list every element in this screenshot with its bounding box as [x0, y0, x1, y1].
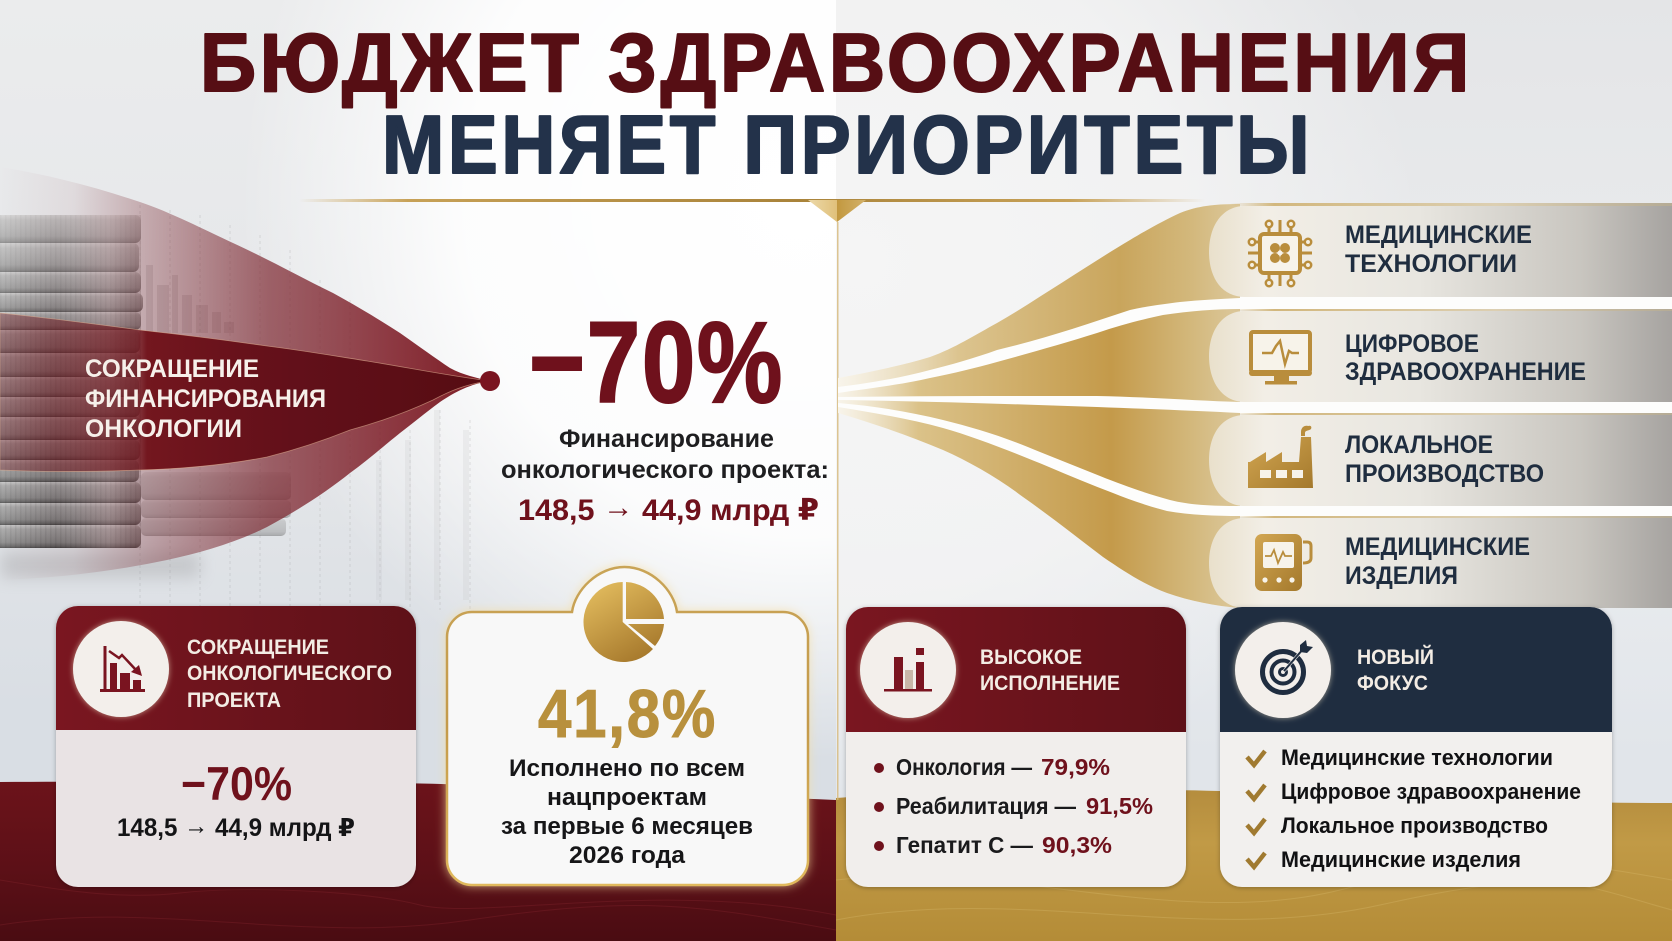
heading: [1357, 645, 1434, 695]
stat: →: [184, 812, 208, 840]
description: за первые 6 месяцев: [501, 813, 753, 840]
icon: target: [1235, 622, 1331, 718]
floor: dark red left: [0, 781, 836, 941]
floor: gold right: [836, 790, 1672, 941]
coin stacks: [0, 215, 291, 578]
heading: ОНКОЛОГИЧЕСКОГО: [187, 662, 392, 685]
title: [200, 16, 1473, 191]
list: focus areas: [1247, 745, 1581, 872]
main stat: 44,9 млрд ₽: [634, 494, 819, 527]
funnel label: ОНКОЛОГИИ: [85, 415, 242, 443]
pill: local production: [1209, 413, 1672, 506]
big number: 41,8%: [538, 676, 717, 752]
pill: medical devices: [1209, 516, 1672, 608]
funnel label: СОКРАЩЕНИЕ: [85, 355, 259, 383]
list: execution rates: 79,9%: [1041, 754, 1110, 780]
white stripes between pills: [838, 204, 1672, 608]
label: [1345, 431, 1544, 488]
label: [1345, 221, 1532, 278]
heading: СОКРАЩЕНИЕ: [187, 636, 329, 659]
icon: monitor with pulse: [1249, 332, 1312, 384]
list: execution rates: Гепатит С —: [896, 832, 1033, 858]
title rule with pointer: [299, 199, 1205, 800]
label: [1345, 533, 1530, 590]
main stat: онкологического проекта:: [501, 456, 829, 484]
icon: bar chart: [860, 622, 956, 718]
stat: [117, 757, 355, 842]
icon: factory: [1248, 426, 1313, 488]
list: focus areas: Медицинские изделия: [1281, 847, 1521, 872]
label: ТЕХНОЛОГИИ: [1345, 250, 1517, 278]
title: МЕНЯЕТ ПРИОРИТЕТЫ: [382, 98, 1313, 191]
funnel: inner shape: [0, 313, 490, 472]
stat: −70%: [181, 757, 292, 810]
main stat: →: [603, 491, 634, 524]
label: ЦИФРОВОЕ: [1345, 330, 1479, 358]
heading: ВЫСОКОЕ: [980, 646, 1082, 669]
stat: 148,5: [117, 814, 180, 842]
label: МЕДИЦИНСКИЕ: [1345, 533, 1530, 561]
label: ПРОИЗВОДСТВО: [1345, 460, 1544, 488]
panel: high execution: [846, 607, 1186, 887]
stat: 44,9 млрд ₽: [208, 814, 355, 842]
label: [1345, 330, 1586, 386]
label: ЗДРАВООХРАНЕНИЕ: [1345, 358, 1586, 386]
pill: digital health: [1209, 309, 1672, 402]
ribbon to local production: [838, 400, 1240, 506]
label: ЛОКАЛЬНОЕ: [1345, 431, 1493, 459]
icon: chip: [1248, 220, 1312, 286]
ribbon to medical devices: [838, 407, 1240, 608]
funnel label: ФИНАНСИРОВАНИЯ: [85, 385, 326, 413]
list: focus areas: Медицинские технологии: [1281, 745, 1553, 770]
heading: ПРОЕКТА: [187, 689, 281, 712]
description: 2026 года: [569, 842, 686, 869]
main stat: [501, 299, 829, 527]
list: execution rates: 91,5%: [1086, 793, 1153, 819]
heading: НОВЫЙ: [1357, 645, 1434, 669]
main stat: Финансирование: [559, 425, 774, 453]
description: Исполнено по всем: [509, 755, 745, 782]
flow ribbons: [838, 204, 1240, 608]
panel: oncology project cut: [56, 606, 416, 887]
list: focus areas: Цифровое здравоохранение: [1281, 779, 1581, 804]
funnel label: [85, 355, 326, 443]
description: [501, 755, 753, 869]
panel: national projects execution: [447, 567, 808, 885]
heading: ИСПОЛНЕНИЕ: [980, 672, 1120, 695]
funnel end dot: [480, 371, 500, 391]
panel: new focus: [1220, 607, 1612, 887]
ribbon to digital health: [838, 309, 1240, 402]
icon: pie chart: [583, 582, 664, 662]
list: execution rates: [874, 754, 1153, 858]
main stat: 148,5: [518, 494, 593, 527]
heading: ФОКУС: [1357, 672, 1428, 695]
ribbon to medical technologies: [838, 204, 1240, 387]
list: execution rates: Реабилитация —: [896, 793, 1076, 819]
heading: [187, 636, 392, 712]
funnel: outer shape: [0, 167, 490, 580]
pill: medical technologies: [1209, 203, 1672, 297]
list: execution rates: Онкология —: [896, 754, 1032, 780]
icon: medical device: [1255, 534, 1311, 591]
main stat: −70%: [529, 299, 784, 427]
heading: [980, 646, 1120, 695]
description: нацпроектам: [547, 784, 707, 811]
list: focus areas: Локальное производство: [1281, 813, 1548, 838]
label: МЕДИЦИНСКИЕ: [1345, 221, 1532, 249]
label: ИЗДЕЛИЯ: [1345, 562, 1458, 590]
list: execution rates: 90,3%: [1042, 832, 1112, 858]
title: БЮДЖЕТ ЗДРАВООХРАНЕНИЯ: [200, 16, 1473, 109]
icon: declining chart: [73, 621, 169, 717]
